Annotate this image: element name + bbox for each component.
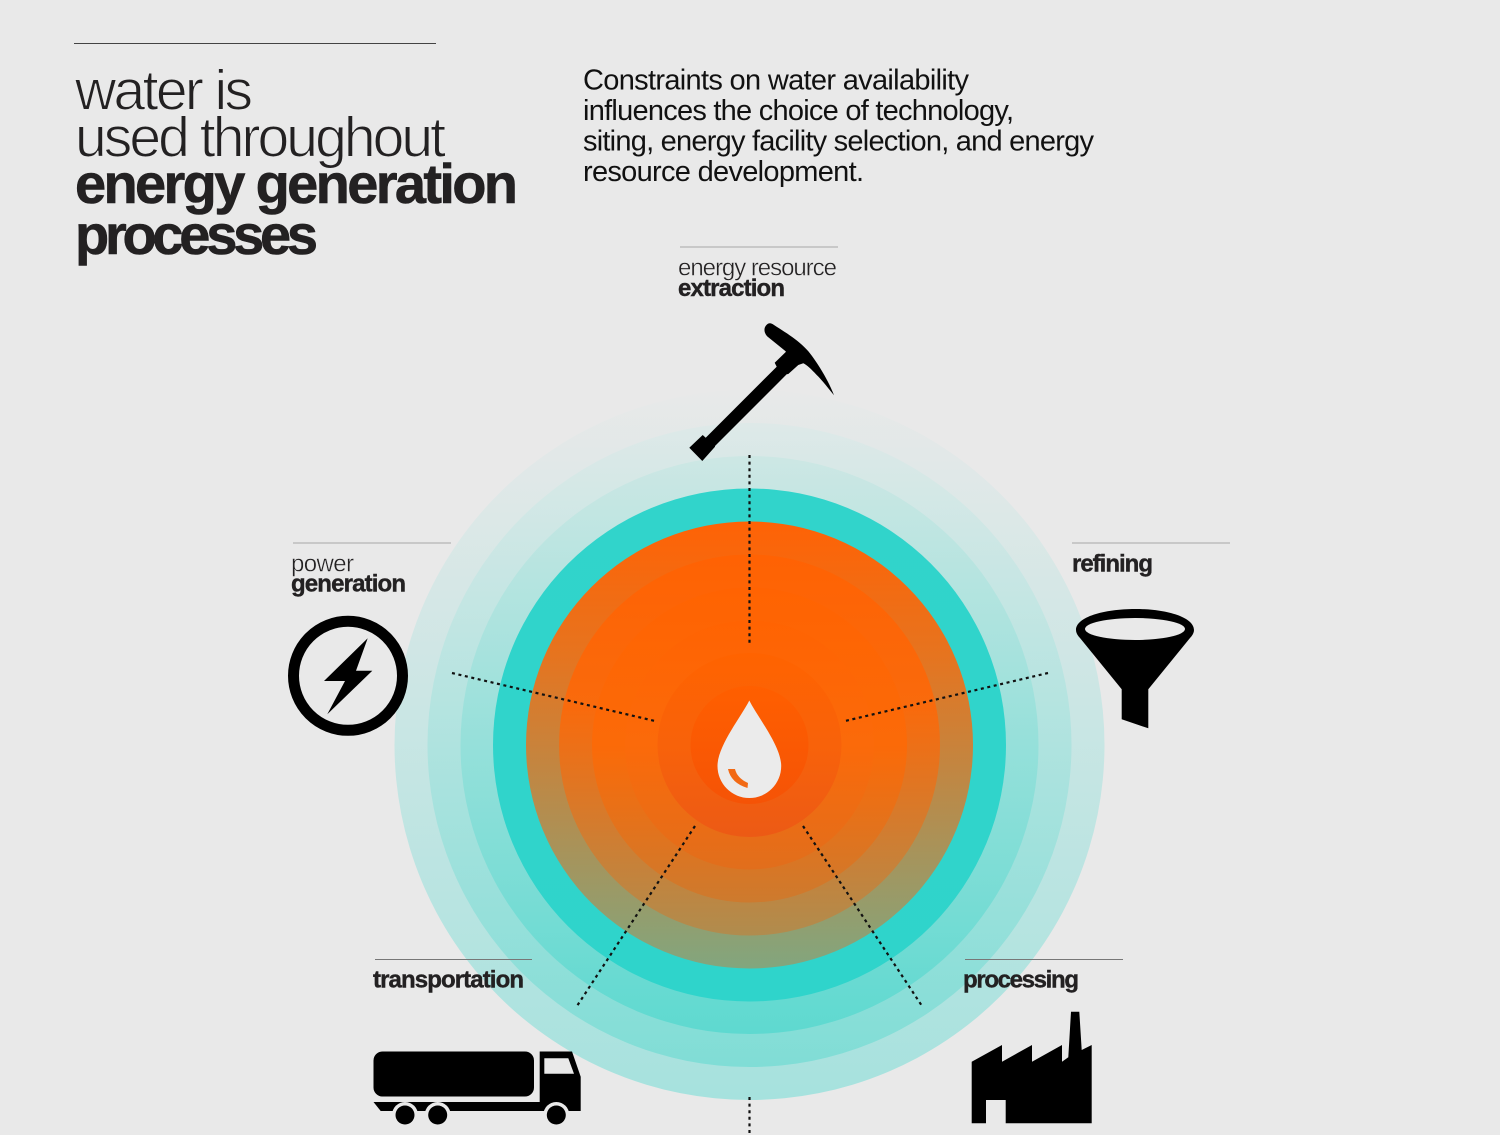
label: energy resource extraction: energy resource [678,254,837,282]
concentric circles diagram [394,390,1104,1100]
intro text: Constraints on water availability [583,64,970,96]
label: processing: processing [963,966,1079,994]
label: power generation: generation [291,570,406,598]
title: processes [75,203,318,266]
label: refining: refining [1072,550,1153,578]
label: transportation: transportation [373,966,524,994]
intro text: resource development. [583,156,864,188]
label: energy resource extraction: extraction [678,275,785,302]
label: energy resource extraction [678,247,838,302]
label: power generation: power [291,550,354,578]
icon: lightning bolt in circle [294,621,402,730]
title: water is [74,58,253,122]
label: power generation [291,543,451,598]
title: energy generation [75,152,518,215]
title: used throughout [75,106,446,170]
intro text: influences the choice of technology, [583,95,1014,127]
icon: factory [972,1012,1092,1123]
icon: tanker truck [374,1052,581,1128]
intro text: siting, energy facility selection, and energy [583,126,1094,158]
icon: water drop [718,700,781,798]
intro text [583,64,1094,188]
title [74,44,518,266]
icon: pickaxe [689,323,834,461]
dotted connector lines [452,455,1048,1135]
icon: funnel [1076,609,1194,728]
